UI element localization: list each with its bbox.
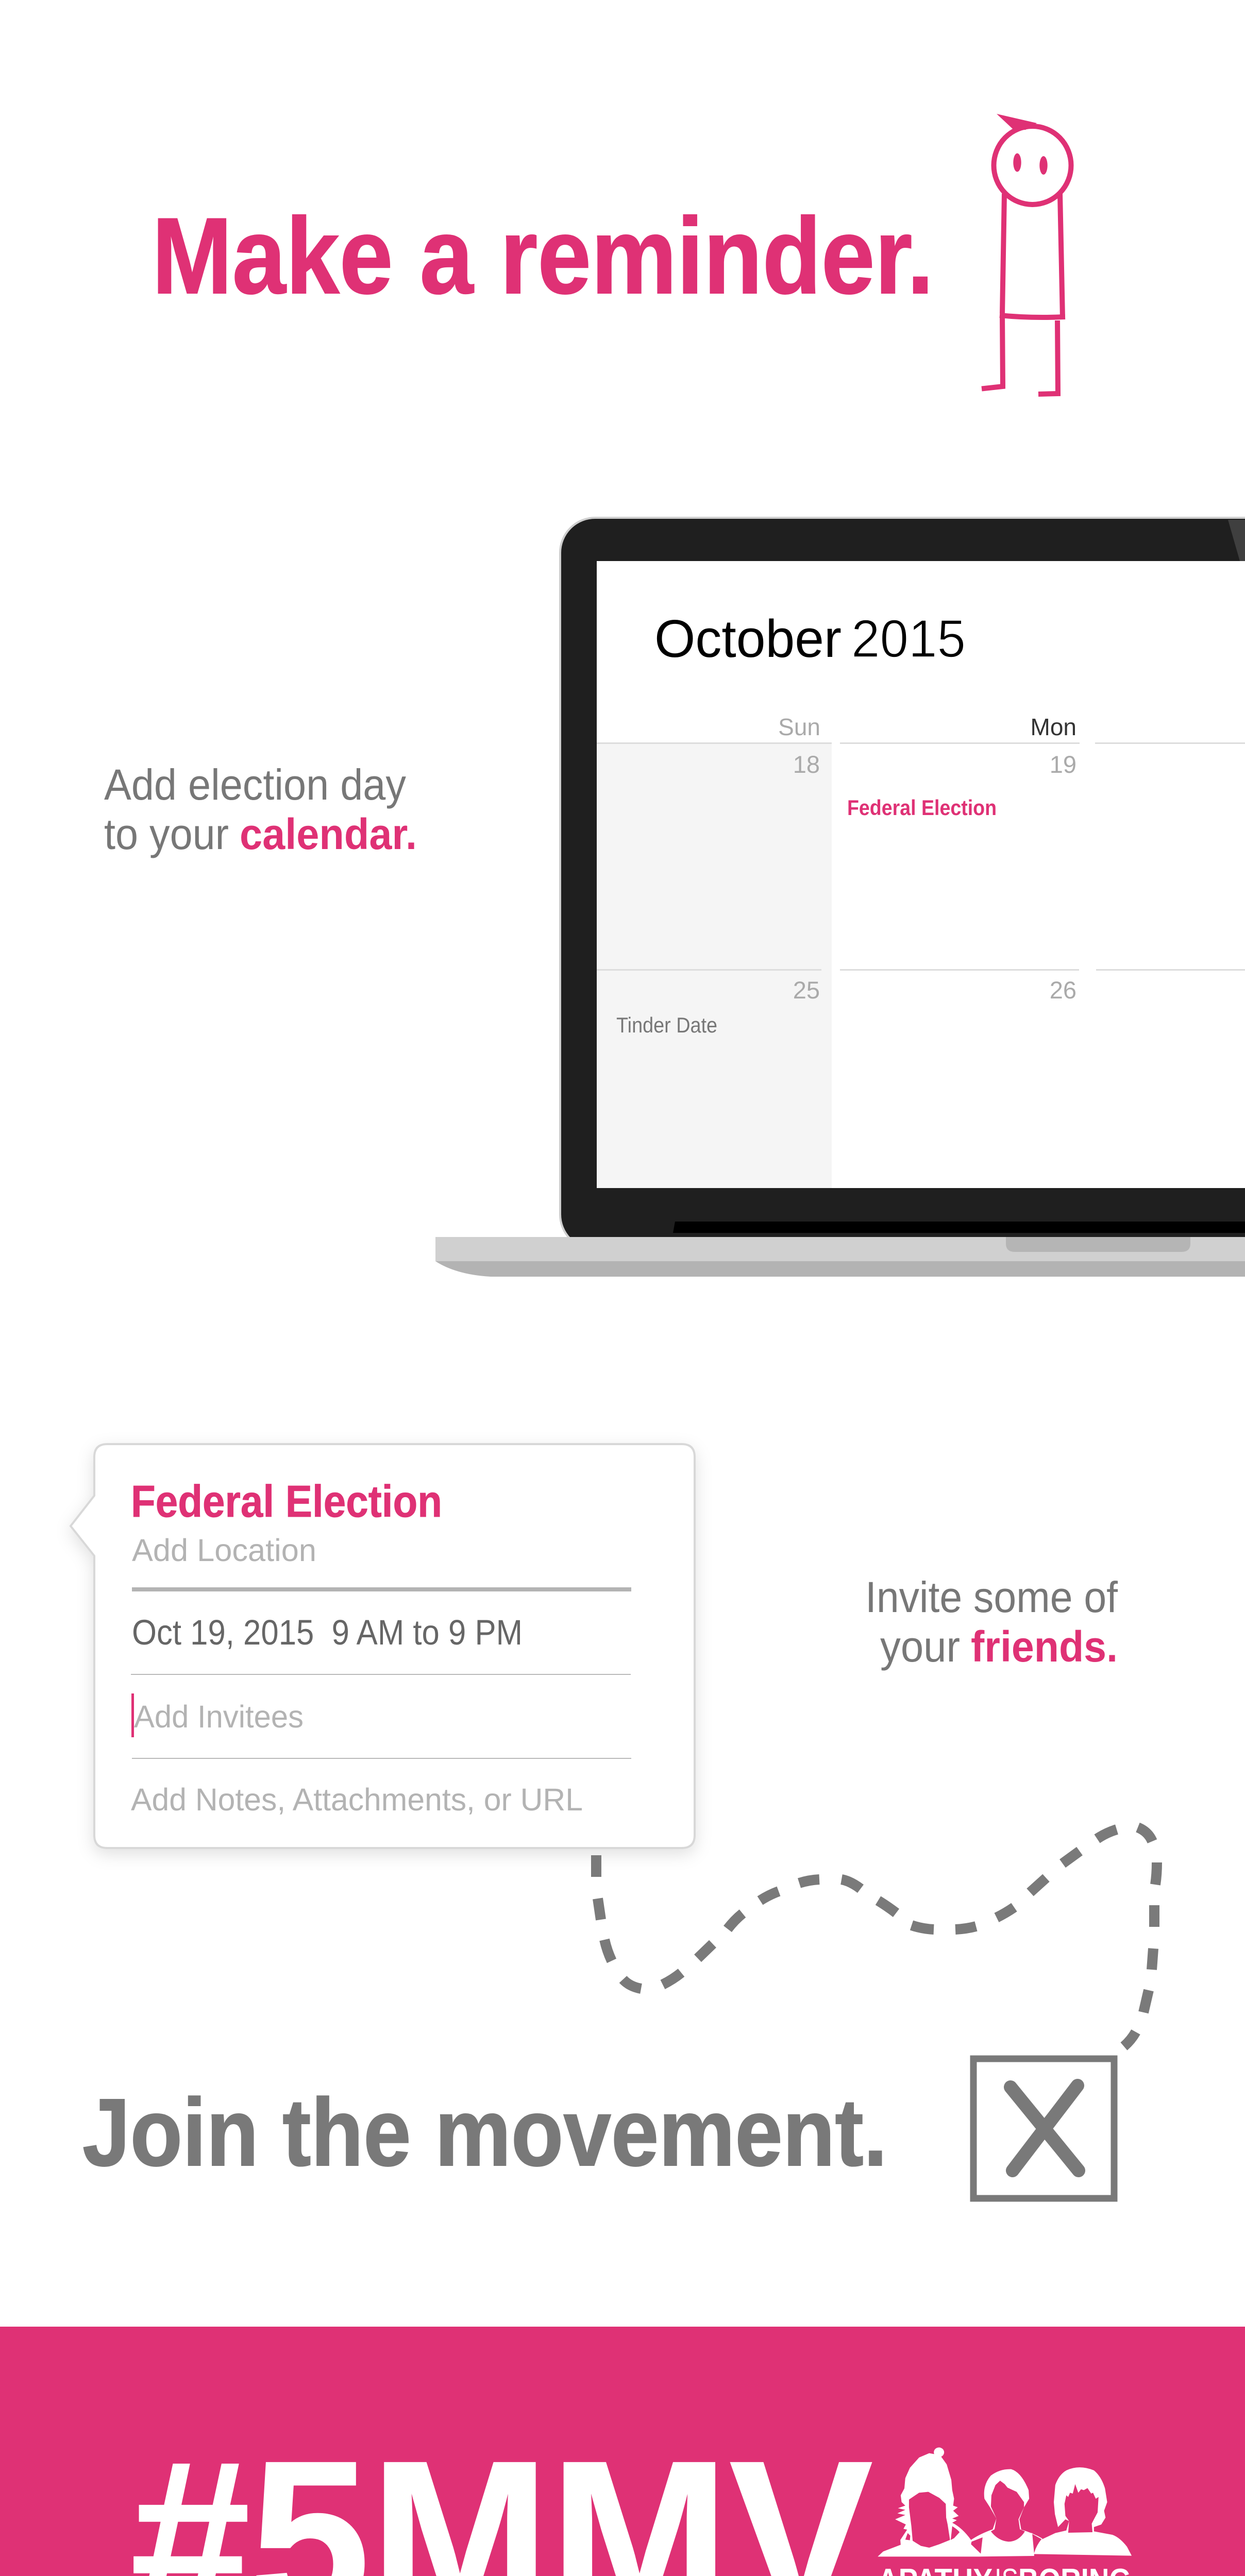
calendar dates: 26 — [1050, 976, 1076, 1004]
calendar day headers — [778, 714, 1076, 740]
event popup panel — [71, 1444, 695, 1848]
popup invitees: Add Invitees — [134, 1699, 304, 1734]
logo: apathy is boring — [877, 2448, 1132, 2576]
event: tinder date: Tinder Date — [616, 1013, 717, 1037]
calendar dates: 18 — [793, 751, 820, 778]
calendar month title — [654, 609, 966, 668]
laptop base — [435, 1237, 1245, 1277]
popup notes: Add Notes, Attachments, or URL — [131, 1782, 583, 1817]
calendar month title: 2015 — [851, 609, 966, 668]
calendar dates: 19 — [1050, 751, 1076, 778]
text: invite friends: friends. — [971, 1622, 1118, 1671]
text: add election day: to your — [104, 810, 229, 858]
text: add election day: calendar. — [240, 810, 417, 858]
calendar day headers: Mon — [1031, 714, 1076, 740]
footer band — [0, 2327, 1245, 2576]
popup location: Add Location — [132, 1533, 316, 1568]
calendar dates — [793, 751, 1076, 1004]
title: Make a reminder: Make a reminder. — [152, 195, 934, 316]
icon: ballot box with X — [973, 2059, 1114, 2198]
text caret — [131, 1693, 134, 1737]
calendar grid lines — [597, 742, 1245, 971]
popup title: Federal Election — [131, 1477, 442, 1527]
icon: stick figure — [982, 114, 1071, 394]
text: add election day — [104, 760, 417, 858]
popup date: Oct 19, 2015 9 AM to 9 PM — [132, 1613, 523, 1652]
icon: three silhouettes — [878, 2448, 1132, 2556]
text: invite friends: your — [880, 1622, 960, 1671]
calendar month title: October — [654, 609, 842, 668]
calendar day headers: Sun — [778, 714, 820, 740]
text: invite friends: Invite some of — [865, 1573, 1118, 1621]
laptop with calendar — [435, 518, 1245, 1277]
logo text english — [878, 2563, 1131, 2576]
text: add election day: Add election day — [104, 760, 406, 809]
heading: join the movement: Join the movement. — [82, 2079, 887, 2186]
calendar dates: 25 — [793, 976, 820, 1004]
event: federal election: Federal Election — [847, 795, 997, 820]
text: invite friends — [865, 1573, 1118, 1671]
arrow: dashed path to ballot — [596, 1827, 1157, 2046]
